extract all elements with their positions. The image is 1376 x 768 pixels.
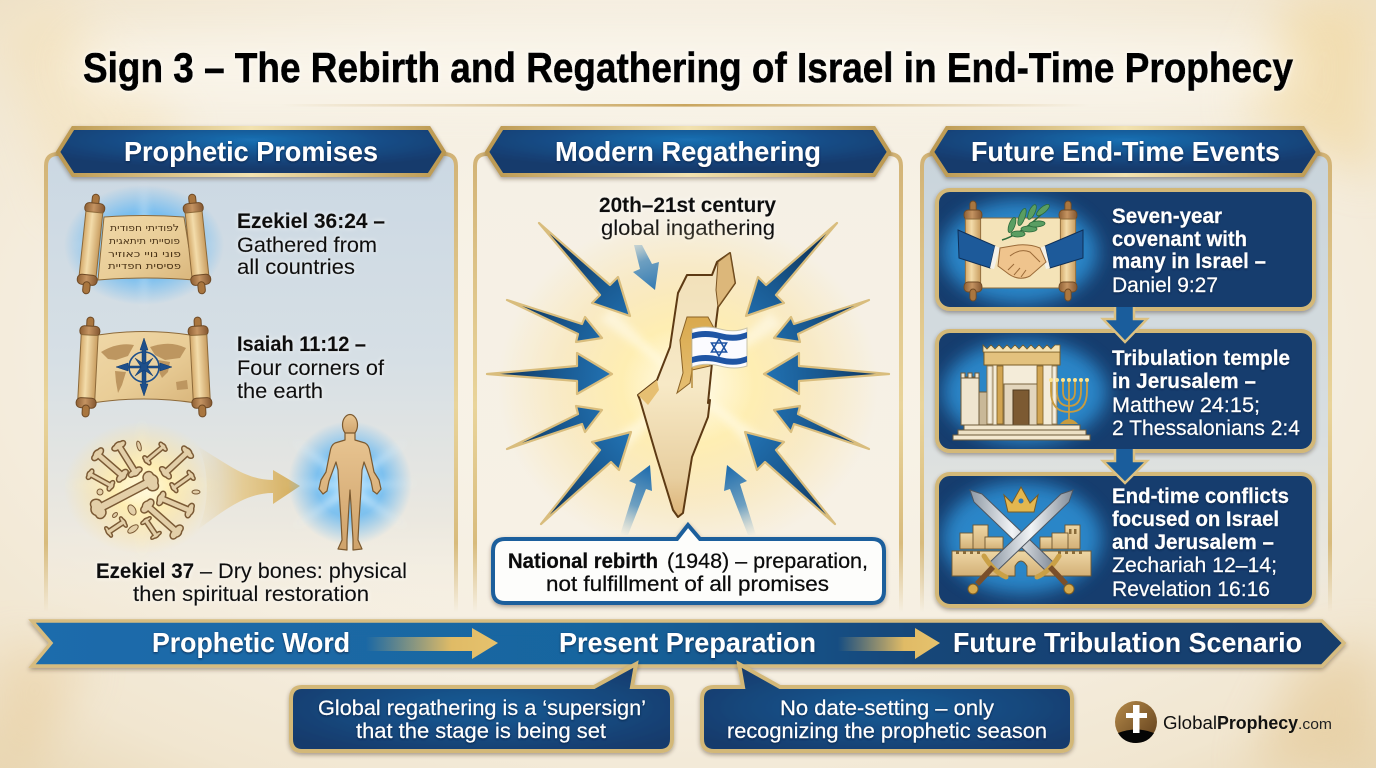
text: Ezekiel 36:24: all countries	[237, 256, 355, 279]
heading: future end-time events: Future End-Time Events	[971, 136, 1280, 167]
callout: no date-setting: recognizing the prophetic season	[727, 720, 1047, 743]
event card: tribulation temple	[937, 331, 1314, 451]
text: Isaiah 11:12: Isaiah 11:12 –	[237, 333, 366, 356]
icon: glowing scroll with Hebrew text	[64, 180, 224, 312]
map glow	[498, 215, 878, 555]
logo: GlobalProphecy.com: Prophecy	[1217, 713, 1298, 733]
icon: glowing scroll with Hebrew text: לפודיתי חפודית	[110, 223, 179, 234]
heading: modern regathering	[487, 128, 889, 175]
text: Ezekiel 37: – Dry bones: physical	[200, 560, 407, 583]
heading: modern regathering: Modern Regathering	[555, 136, 821, 167]
text: Ezekiel 37: Ezekiel 37	[96, 560, 194, 583]
callout: national rebirth: (1948) – preparation,	[667, 550, 868, 573]
icon: covenant scroll and handshake	[958, 201, 1083, 301]
text: conflicts	[1112, 485, 1289, 601]
icon: temple and menorah	[953, 345, 1090, 440]
callout: no date-setting: No date-setting – only	[780, 697, 995, 720]
callout: supersign: Global regathering is a ‘supersign’	[318, 697, 646, 720]
arrow: bones to restored body	[197, 446, 300, 530]
text: conflicts: Revelation 16:16	[1112, 578, 1270, 601]
callout: supersign	[291, 664, 672, 751]
timeline ribbon	[32, 621, 1344, 666]
arrow: word to preparation	[366, 628, 498, 659]
callout: no date-setting	[702, 664, 1072, 751]
text: Ezekiel 37	[96, 560, 407, 606]
arrow: preparation to future	[838, 628, 940, 659]
panel: prophetic promises	[46, 128, 456, 612]
text: covenant	[1112, 205, 1266, 297]
arrow: temple to conflicts	[1103, 449, 1147, 483]
text: Isaiah 11:12: Four corners of	[237, 357, 384, 380]
text: temple: Matthew 24:15;	[1112, 394, 1260, 417]
timeline ribbon: Future Tribulation Scenario	[953, 627, 1302, 658]
icon: glowing scroll with Hebrew text: פסיסית חפדיית	[108, 261, 181, 272]
text: temple	[1112, 347, 1300, 440]
icon: map scroll with compass	[75, 317, 213, 417]
icon: glowing scroll with Hebrew text: פוני נויי כאוזיר	[108, 249, 181, 260]
text: Ezekiel 36:24: Ezekiel 36:24 –	[237, 210, 385, 233]
map of Israel	[638, 253, 735, 517]
text: temple: in Jerusalem –	[1112, 370, 1256, 393]
logo: GlobalProphecy.com: Global	[1163, 713, 1217, 733]
event card: end-time conflicts	[937, 474, 1314, 606]
text: conflicts: End-time conflicts	[1112, 485, 1289, 508]
text: global ingathering: 20th–21st century	[599, 194, 776, 217]
text: conflicts: focused on Israel	[1112, 508, 1279, 531]
panel: future end-time events	[922, 128, 1330, 612]
text: covenant: Seven-year	[1112, 205, 1222, 228]
arrow: covenant to temple	[1103, 307, 1147, 342]
arrows converging on Israel	[487, 223, 889, 535]
text: Ezekiel 37: then spiritual restoration	[133, 583, 369, 606]
text: covenant: Daniel 9:27	[1112, 274, 1218, 297]
text: Isaiah 11:12	[237, 333, 384, 403]
callout: national rebirth: not fulfillment of all promises	[546, 573, 829, 596]
text: Ezekiel 36:24	[237, 210, 385, 279]
panel: modern regathering	[475, 128, 901, 612]
text: conflicts: and Jerusalem –	[1112, 531, 1274, 554]
text: Isaiah 11:12: the earth	[237, 380, 323, 403]
event card: seven-year covenant	[937, 190, 1314, 309]
icon: crossed swords, crown and city walls	[952, 487, 1091, 594]
text: covenant: covenant with	[1112, 228, 1247, 251]
callout: national rebirth	[493, 525, 884, 603]
heading: prophetic promises: Prophetic Promises	[124, 136, 378, 167]
heading: future end-time events	[932, 128, 1318, 175]
text: conflicts: Zechariah 12–14;	[1112, 554, 1277, 577]
callout: supersign: that the stage is being set	[356, 720, 606, 743]
text: global ingathering: global ingathering	[601, 217, 775, 240]
icon: Israeli flag	[692, 327, 747, 388]
text: Ezekiel 36:24: Gathered from	[237, 234, 377, 257]
logo: GlobalProphecy.com: .com	[1298, 716, 1332, 733]
heading: prophetic promises	[58, 128, 444, 175]
callout: national rebirth: National rebirth	[508, 550, 658, 573]
timeline ribbon: Present Preparation	[559, 627, 816, 658]
text: global ingathering	[599, 194, 776, 240]
logo: GlobalProphecy.com	[1115, 701, 1332, 743]
text: covenant: many in Israel –	[1112, 250, 1266, 273]
text: temple: 2 Thessalonians 2:4	[1112, 417, 1300, 440]
icon: dry bones	[62, 418, 222, 558]
text: temple: Tribulation temple	[1112, 347, 1290, 370]
timeline ribbon: Prophetic Word	[152, 627, 350, 658]
icon: glowing scroll with Hebrew text: פוסייתי תיתאגית	[109, 236, 180, 247]
icon: restored human figure	[282, 414, 420, 550]
